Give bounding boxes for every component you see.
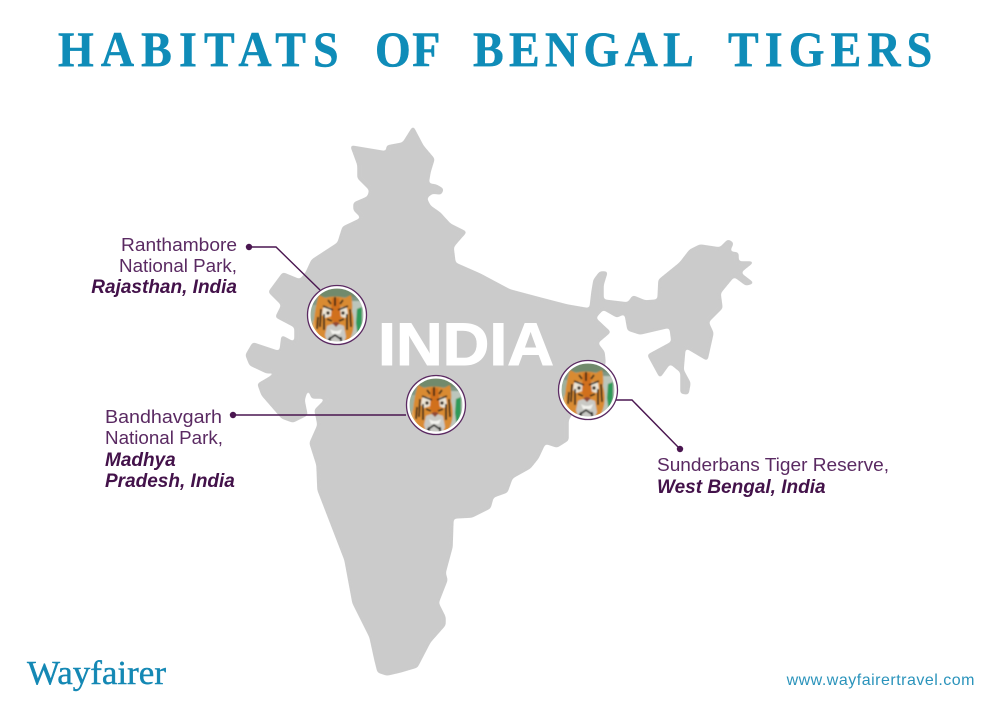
label: Bandhavgarh: Madhya (105, 450, 176, 471)
title: TIGERS (728, 22, 932, 77)
label: Bandhavgarh: National Park, (105, 427, 223, 448)
label: Ranthambore: Rajasthan, India (91, 277, 237, 298)
title: BENGAL (473, 22, 694, 77)
label: Ranthambore (91, 234, 237, 298)
label: Sunderbans (657, 454, 889, 498)
label: Bandhavgarh: Bandhavgarh (105, 406, 222, 427)
title (58, 22, 932, 77)
label: Ranthambore: National Park, (119, 255, 237, 276)
map of India (246, 127, 753, 675)
label: Sunderbans: Sunderbans Tiger Reserve, (657, 454, 889, 475)
country label: INDIA: INDIA (378, 311, 554, 378)
label: Ranthambore: Ranthambore (121, 234, 237, 255)
logo: Wayfarer: Wayfairer (27, 655, 167, 692)
title: OF (375, 22, 440, 77)
title: HABITATS (58, 22, 339, 77)
label: Bandhavgarh: Pradesh, India (105, 471, 235, 492)
icon: tiger photo, Ranthambore (308, 286, 366, 345)
icon: tiger photo, Bandhavgarh (406, 376, 466, 435)
website URL: www.wayfairertravel.com (786, 672, 975, 689)
connector: Ranthambore (246, 244, 320, 290)
label: Sunderbans: West Bengal, India (657, 477, 826, 498)
label: Bandhavgarh (105, 406, 235, 492)
connector: Bandhavgarh (230, 412, 406, 418)
icon: tiger photo, Sunderbans (558, 360, 618, 420)
connector: Sunderbans (616, 400, 683, 452)
